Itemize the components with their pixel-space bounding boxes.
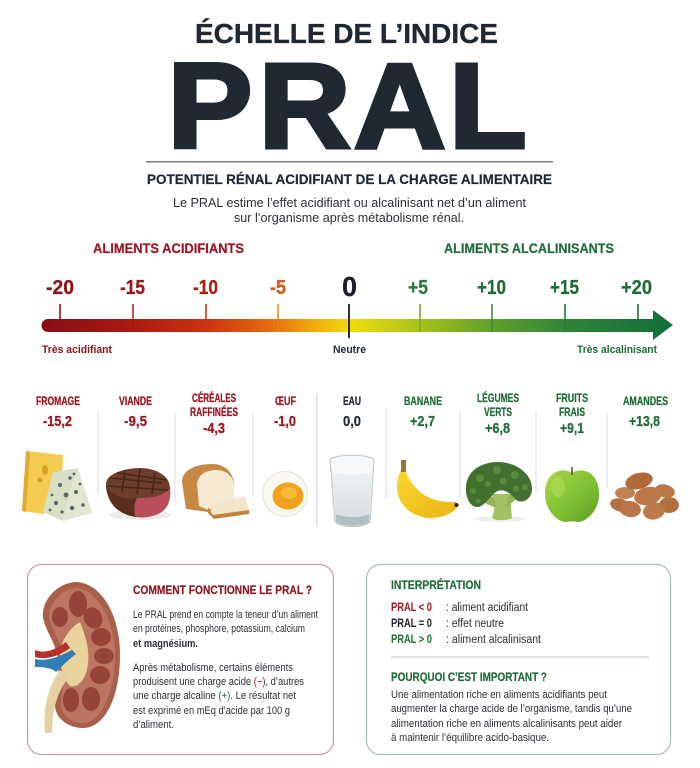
légumes label: +6,8: [485, 421, 510, 437]
eau label: EAU: [343, 396, 361, 408]
céréales label: RAFFINÉES: [190, 406, 238, 419]
scale numbers: -10: [193, 277, 218, 299]
fruits label: [556, 393, 588, 437]
icon: cheese: [22, 451, 92, 521]
céréales label: CÉRÉALES: [192, 392, 236, 405]
title line: échelle de l'indice: ÉCHELLE DE L’INDICE: [195, 18, 498, 49]
banane label: BANANE: [404, 396, 442, 408]
panel: comment fonctionne le PRAL: [28, 564, 334, 754]
céréales label: [190, 392, 238, 437]
text: first paragraph: et magnésium.: [133, 638, 198, 650]
icon: green apple: [545, 467, 599, 522]
icon: almonds: [609, 470, 679, 522]
text: first paragraph: en protéines, phosphore, potassium, calcium: [133, 623, 305, 635]
viande label: -9,5: [124, 414, 147, 430]
céréales label: -4,3: [203, 421, 225, 437]
text: first paragraph: [133, 609, 318, 650]
eau label: 0,0: [343, 414, 361, 430]
text: second paragraph: est exprimé en mEq d’acide par 100 g: [133, 705, 290, 717]
text: second paragraph: Après métabolisme, certains éléments: [133, 662, 293, 674]
text: pourquoi: augmenter la charge acide de l’organisme, tandis qu’une: [391, 703, 632, 715]
oeuf label: [274, 396, 296, 430]
viande label: VIANDE: [119, 396, 152, 408]
title: [168, 18, 527, 174]
icon: kidney: [35, 582, 120, 733]
text: second paragraph: produisent une charge acide (−), d’autres: [133, 676, 304, 688]
scale numbers: -5: [270, 277, 286, 299]
heading: interprétation: INTERPRÉTATION: [391, 577, 481, 592]
text: second paragraph: [133, 662, 304, 731]
icon: glass of water: [330, 455, 374, 526]
heading: pourquoi: POURQUOI C’EST IMPORTANT ?: [391, 670, 547, 684]
scale end labels: Très alcalinisant: [577, 344, 657, 356]
scale numbers: -20: [46, 277, 74, 299]
text: pourquoi: [391, 689, 632, 744]
icon: bread: [182, 464, 249, 519]
fromage label: FROMAGE: [36, 396, 80, 408]
viande label: [119, 396, 152, 430]
légumes label: LÉGUMES: [477, 392, 519, 405]
legend rows: [391, 602, 542, 646]
fruits label: FRUITS: [556, 393, 588, 405]
legend rows: : aliment alcalinisant: [446, 634, 542, 646]
heading: comment fonctionne: COMMENT FONCTIONNE LE PRAL ?: [133, 583, 312, 597]
text: second paragraph: d’aliment.: [133, 719, 174, 731]
banane label: +2,7: [410, 414, 435, 430]
heading: aliments acidifiants: ALIMENTS ACIDIFIANTS: [93, 240, 244, 256]
icon: broccoli: [466, 462, 532, 522]
fromage label: [36, 396, 80, 430]
text: first paragraph: Le PRAL prend en compte la teneur d’un aliment: [133, 609, 318, 621]
title word: PRAL: PRAL: [168, 39, 527, 174]
scale numbers: 0: [342, 271, 357, 302]
fruits label: FRAIS: [559, 407, 585, 419]
scale numbers: +15: [550, 277, 579, 299]
icon: banana: [397, 460, 458, 518]
scale numbers: +5: [408, 277, 428, 299]
legend rows: : effet neutre: [446, 618, 504, 630]
text: pourquoi: Une alimentation riche en aliments acidifiants peut: [391, 689, 607, 701]
amandes label: [623, 396, 668, 430]
legend rows: PRAL > 0: [391, 634, 432, 646]
heading: aliments alcalinisants: ALIMENTS ALCALINISANTS: [444, 240, 614, 256]
food labels and values: [36, 392, 668, 437]
intro text: sur l’organisme après métabolisme rénal.: [234, 210, 464, 225]
panel: interprétation: [366, 564, 670, 754]
scale numbers: -15: [120, 277, 145, 299]
intro text: Le PRAL estime l’effet acidifiant ou alcalinisant net d’un aliment: [173, 195, 526, 210]
legend rows: : aliment acidifiant: [446, 602, 529, 614]
banane label: [404, 396, 442, 430]
icon: steak: [106, 468, 171, 520]
oeuf label: -1,0: [274, 414, 296, 430]
légumes label: [477, 392, 519, 437]
oeuf label: ŒUF: [275, 396, 296, 408]
amandes label: +13,8: [629, 414, 660, 430]
scale bar with arrow: [42, 304, 673, 340]
legend rows: PRAL < 0: [391, 602, 432, 614]
subtitle: POTENTIEL RÉNAL ACIDIFIANT DE LA CHARGE ALIMENTAIRE: [147, 171, 552, 187]
scale end labels: Neutre: [333, 344, 366, 356]
scale numbers: +10: [477, 277, 506, 299]
scale numbers: +20: [621, 277, 652, 299]
scale numbers: [46, 271, 652, 302]
text: pourquoi: à maintenir l’équilibre acido-basique.: [391, 732, 549, 744]
légumes label: VERTS: [484, 407, 512, 419]
scale end labels: [42, 344, 657, 356]
eau label: [343, 396, 361, 430]
text: pourquoi: alimentation riche en aliments alcalinisants peut aider: [391, 718, 622, 730]
legend rows: PRAL = 0: [391, 618, 432, 630]
icon: egg: [262, 471, 308, 517]
intro text: [173, 195, 526, 225]
fromage label: -15,2: [43, 414, 72, 430]
text: second paragraph: une charge alcaline (+). Le résultat net: [133, 690, 296, 702]
fruits label: +9,1: [560, 421, 584, 437]
amandes label: AMANDES: [623, 396, 668, 408]
scale end labels: Très acidifiant: [42, 344, 112, 356]
